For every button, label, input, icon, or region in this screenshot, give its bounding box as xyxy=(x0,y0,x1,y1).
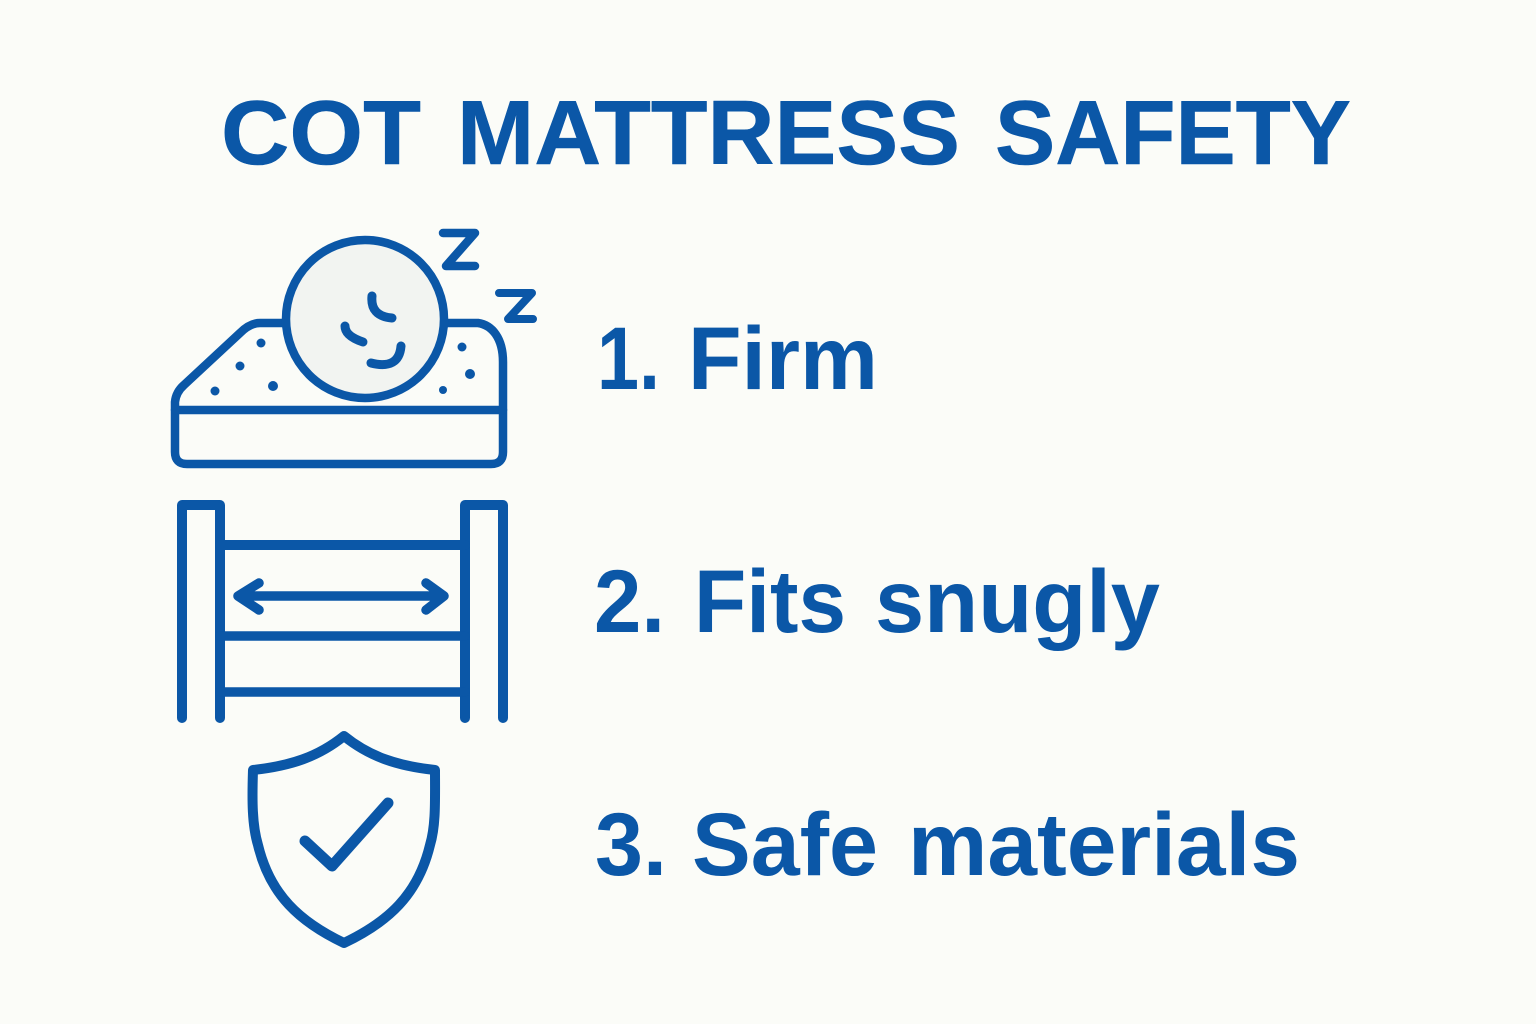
icon: baby sleeping on firm mattress xyxy=(175,233,533,464)
title: COT xyxy=(221,83,421,184)
label: fits snugly: snugly xyxy=(875,551,1160,651)
left post xyxy=(182,505,220,718)
small sleep Z xyxy=(499,293,533,319)
label: firm xyxy=(597,308,878,408)
label: firm: Firm xyxy=(688,308,878,408)
icon: cot frame with snug fit arrow xyxy=(182,505,503,718)
baby face xyxy=(345,296,401,365)
check mark xyxy=(305,803,388,866)
icon: safety shield with check xyxy=(253,736,435,943)
label: fits snugly: Fits xyxy=(694,551,846,651)
label: safe materials: 3. xyxy=(595,794,667,894)
label: safe materials: materials xyxy=(908,794,1300,894)
rails xyxy=(220,545,465,692)
mattress top xyxy=(175,323,503,410)
label: fits snugly xyxy=(594,551,1160,651)
large sleep Z xyxy=(443,233,475,266)
right post xyxy=(465,505,503,718)
shield xyxy=(253,736,435,943)
title xyxy=(221,83,1351,184)
double arrow xyxy=(238,583,444,610)
title: MATTRESS xyxy=(457,83,960,184)
mattress speckles xyxy=(210,338,475,396)
label: fits snugly: 2. xyxy=(594,551,665,651)
label: safe materials xyxy=(595,794,1300,894)
label: firm: 1. xyxy=(597,308,660,408)
title: SAFETY xyxy=(995,83,1351,184)
mattress base xyxy=(175,410,503,464)
label: safe materials: Safe xyxy=(692,794,878,894)
baby head xyxy=(286,240,444,398)
